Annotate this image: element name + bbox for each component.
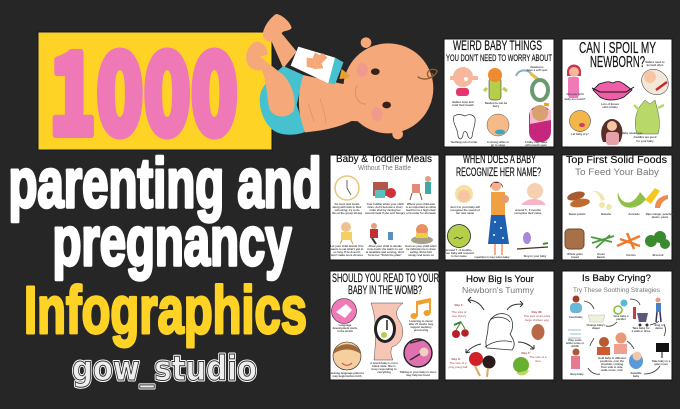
icon: hose: [516, 70, 548, 100]
captions: go to sleep: [491, 143, 505, 147]
panel title: WEIRD BABY THINGS: [453, 37, 542, 53]
captions: around 7 - 9 months,: [446, 248, 472, 252]
icon: smiling child: [333, 342, 361, 370]
icon: diaper: [588, 315, 605, 322]
icon: mother with child: [601, 119, 622, 145]
captions row two: Even as your child when: [405, 244, 437, 248]
panel subtitle: To Feed Your Baby: [575, 167, 659, 178]
captions: recognize the sound of: [450, 208, 480, 212]
captions: Listening to music: [409, 319, 433, 323]
captions: Talking to your baby in utero: [400, 370, 437, 374]
panel: when does a baby recognize her name: RECOGNIZE HER NAME?: [456, 165, 541, 179]
diaper: [260, 66, 306, 135]
captions row two: simply and move on: [408, 253, 434, 257]
icon: baby in high chair: [340, 222, 353, 244]
hand: [307, 52, 327, 69]
captions: Take baby for: [632, 326, 650, 330]
panel title: Top First Solid Foods: [566, 154, 667, 166]
back leg: [263, 14, 297, 68]
icon: stroller: [633, 307, 648, 326]
icon: baby in pink diaper: [450, 67, 478, 96]
icon: clock: [335, 176, 359, 200]
illustration: mother sketch: [485, 314, 514, 350]
icon: crawling baby: [521, 183, 546, 205]
head: [343, 43, 433, 133]
ears: [361, 37, 371, 48]
icon: swaddled newborn: [637, 64, 673, 100]
captions: Teething out of order: [451, 140, 477, 144]
captions row two: Let your child decide if he: [330, 244, 364, 248]
captions: calm a baby: [602, 105, 618, 109]
icon: egg: [532, 324, 544, 340]
icon: swaddled baby: [529, 104, 551, 142]
captions: recognize their name: [515, 211, 542, 215]
captions row two: wants to eat what's put in: [330, 247, 364, 251]
captions: dance: [655, 326, 663, 330]
captions: after 27 weeks may: [409, 322, 434, 326]
panel title: Baby & Toddler Meals: [336, 154, 432, 165]
captions: Feed baby: [569, 315, 583, 319]
icon: toast: [565, 229, 584, 249]
heading: 1000: 1000: [49, 4, 238, 168]
labels: tummy sizes: lime: [535, 359, 541, 363]
captions row one: Avocado: [628, 212, 640, 216]
icon: lime: [513, 357, 529, 375]
panel subtitle: YOU DON'T NEED TO WORRY ABOUT: [446, 53, 552, 64]
icon: swaddled baby: [629, 352, 643, 369]
captions: Burp baby: [570, 372, 584, 376]
arrows: [466, 297, 534, 353]
icon: music note: [410, 298, 431, 319]
icon: banana: [592, 191, 612, 210]
icon: black tv: [656, 343, 669, 358]
captions row two: [330, 244, 437, 257]
captions row two: how much she wants to eat: [368, 247, 403, 251]
captions row two: eating. Show him: [410, 250, 433, 254]
captions: shhhh: [571, 344, 579, 348]
icon: sweet potato: [566, 190, 591, 209]
eyes: [371, 68, 380, 75]
captions row two: [567, 252, 664, 259]
captions: Swaddle: [631, 371, 642, 375]
captions: Let baby cry?: [571, 132, 589, 136]
captions row one: Sweet potato: [569, 212, 586, 216]
captions row one: along with kids in their: [332, 205, 362, 209]
labels: tummy sizes: large chicken egg: [525, 318, 549, 322]
icon: crying baby face: [570, 110, 590, 132]
captions row two: bread: [571, 255, 579, 259]
captions: baby: [633, 374, 640, 378]
labels: tummy sizes: The size of a: [529, 355, 547, 359]
captions: [444, 205, 547, 259]
captions: may begin before birth: [333, 374, 362, 378]
captions: support auditory: [410, 325, 432, 329]
captions: blank slate. She is: [372, 364, 396, 368]
captions row one: schooling; try to do: [334, 208, 360, 212]
yellow banner with 1000: [38, 4, 272, 168]
arrows: [584, 299, 666, 374]
icon: feeding mother: [570, 296, 582, 313]
labels: tummy sizes: Day 1:: [454, 303, 464, 307]
labels: tummy sizes: one cherry: [452, 314, 467, 318]
panel: when does a baby recognize her name: [444, 152, 554, 260]
captions row one: rules, don't become a short: [368, 205, 403, 209]
captions: Hold baby in different: [598, 356, 626, 360]
captions: busy responding to: [372, 367, 397, 371]
icon: baby with pacifier: [487, 114, 509, 136]
icon: pacifier: [614, 300, 628, 314]
icon: shower: [568, 330, 581, 338]
captions row two: force her "finish the plate": [368, 253, 403, 257]
icon: family group: [597, 332, 627, 355]
captions row one: [332, 202, 436, 215]
captions: [451, 65, 548, 147]
captions: positions, over the: [600, 359, 624, 363]
icon: green monster: [484, 68, 507, 100]
labels: tummy sizes: Day 30:: [532, 310, 542, 314]
captions: quiet room: [654, 362, 669, 366]
captions: to her name: [451, 254, 467, 258]
captions: her own name: [456, 211, 475, 215]
captions: development starts: [333, 326, 358, 330]
icon: pregnant belly with fetus: [371, 303, 403, 360]
captions: in the womb: [337, 329, 353, 333]
captions: Cuddles are good: [634, 135, 657, 139]
icon: food and apple: [373, 182, 396, 198]
captions: have a soft spot: [527, 68, 547, 72]
captions row two: at mealtime and serving, don't: [366, 250, 404, 254]
captions: [565, 60, 665, 143]
front leg: [246, 42, 295, 116]
icon: blonde baby: [455, 185, 473, 203]
panel: can I spoil my newborn: [562, 39, 673, 147]
captions: A baby may sleep: [525, 140, 548, 144]
panel subtitle: Try These Soothing Strategies: [573, 287, 661, 294]
panel: weird baby things: [444, 37, 554, 147]
captions: Lots of kisses: [601, 102, 619, 106]
captions: your baby will respond: [444, 251, 474, 255]
captions row one: [569, 212, 674, 219]
nose: [355, 85, 366, 104]
icon: green face: [448, 224, 470, 248]
icon: woman: [567, 64, 581, 98]
captions: baby too much?: [565, 97, 586, 101]
icon: mango and peach slices: [645, 188, 668, 208]
labels: tummy sizes: The size of a: [449, 361, 467, 365]
icon: bird on branch: [517, 232, 548, 249]
captions: shoulder, rocking: [601, 362, 624, 366]
labels: tummy sizes: Day 3:: [451, 357, 461, 361]
cheeks: [357, 63, 368, 77]
captions: Babies form and: [452, 100, 474, 104]
captions: Change baby's: [586, 323, 606, 327]
captions: everything: [377, 370, 391, 374]
labels: tummy sizes: The size of: [452, 310, 466, 314]
captions: Language: [339, 323, 352, 327]
captions row one: plums, pears: [652, 215, 669, 219]
captions: walk, move, rock: [600, 368, 623, 372]
captions: [330, 319, 437, 378]
captions row one: Your toddler when your child: [367, 202, 404, 206]
captions row two: Allow your child to decide: [368, 244, 402, 248]
captions row one: Do most and meals: [335, 202, 360, 206]
captions row one: this at the group all day: [332, 211, 363, 215]
captions row one: is as important as what,: [406, 205, 436, 209]
headline: Infographics: Infographics: [24, 273, 307, 348]
captions: Give baby a: [613, 314, 629, 318]
captions row two: Carrots: [626, 253, 636, 257]
captions: pacifier: [616, 317, 626, 321]
icon: green beans: [591, 235, 614, 248]
captions: a walk or drive: [632, 329, 651, 333]
icon: magenta circle with fetus: [404, 339, 432, 367]
captions: A strong reflex to: [487, 140, 509, 144]
captions: [565, 314, 671, 378]
panel title: SHOULD YOU READ TO YOUR: [332, 271, 439, 285]
labels: tummy sizes: The size of an extra: [524, 314, 550, 318]
icon: avocado: [618, 192, 646, 208]
captions row two: Beans: [597, 255, 606, 259]
labels: tummy sizes: Day 7:: [521, 351, 531, 355]
captions row two: Whole grain: [567, 252, 583, 256]
icon: father feeding toddler: [370, 223, 393, 244]
icon: cherries: [452, 322, 469, 338]
captions: for your baby: [636, 139, 654, 143]
panel: how big is your newborn's tummy: [445, 271, 554, 380]
captions row one: Banana: [601, 212, 611, 216]
headline: parenting and: parenting and: [8, 144, 322, 222]
illustration: baby drinking from bottle: [246, 14, 437, 139]
captions row one: feed her in a high chair: [406, 208, 436, 212]
icon: carrots: [617, 233, 640, 249]
captions: diaper: [592, 326, 600, 330]
captions row two: don't make more choices: [331, 253, 364, 257]
captions: from side to side,: [601, 365, 623, 369]
labels: tummy sizes: [449, 303, 550, 369]
captions: Newborns: [530, 65, 544, 69]
captions row one: or booster for all meals: [406, 211, 436, 215]
captions: Hearing language patterns: [330, 371, 364, 375]
labels: tummy sizes: ping pong ball: [449, 365, 468, 369]
captions: Just 4 to your baby will: [450, 205, 480, 209]
bottle: [291, 47, 343, 84]
panel title: How Big Is Your: [466, 274, 534, 285]
captions: processing: [414, 328, 429, 332]
icon: tooth: [454, 114, 475, 139]
headline: pregnancy: pregnancy: [52, 202, 292, 280]
captions: Can you hold: [566, 92, 584, 96]
icon: ping pong paddles: [469, 352, 496, 377]
icon: rocking mother: [571, 348, 580, 369]
captions: Sing to your baby: [524, 254, 547, 258]
panel subtitle: Newborn's Tummy: [462, 285, 535, 295]
captions: hold their breath: [452, 103, 474, 107]
captions row two: Broccoli: [653, 253, 664, 257]
captions row two: he indicates he is done: [406, 247, 436, 251]
panel: baby and toddler meals: [330, 154, 439, 260]
captions: Newborns can be: [485, 101, 508, 105]
captions row two: so long. If he doesn't,: [333, 250, 361, 254]
panel: top first solid foods: [562, 154, 674, 260]
icon: mother holding baby: [488, 181, 509, 255]
captions: hairy: [493, 104, 500, 108]
captions row one: Where your child eats: [407, 202, 435, 206]
captions: around 5 - 6 months: [515, 208, 541, 212]
captions: Sing or: [654, 323, 664, 327]
author name: gow_studio: gow_studio: [72, 349, 257, 389]
captions: repetition is key when baby: [474, 255, 510, 259]
panel: can I spoil my newborn: NEWBORN?: [590, 54, 645, 71]
captions row one: order chef by mixing her: [369, 208, 401, 212]
captions: Play some: [568, 338, 582, 342]
hair curl: [418, 69, 437, 79]
captions: be held often: [647, 63, 664, 67]
panel title: Is Baby Crying?: [582, 273, 651, 284]
panel: is baby crying: [562, 271, 672, 380]
icon: pink circle with baby: [332, 298, 356, 324]
icon: green cat: [634, 100, 664, 134]
captions: A womb baby is not a: [370, 361, 398, 365]
panel: should you read to your baby in the womb: BABY IN THE WOMB?: [348, 283, 422, 297]
icon: lips: [592, 82, 634, 100]
icon: parent and high chair: [410, 176, 431, 200]
torso and neck: [299, 75, 367, 132]
captions: Take baby to a: [652, 359, 671, 363]
panel: should you read to your baby in the womb: [330, 271, 439, 380]
captions: Baby needs you: [622, 131, 643, 135]
icon: broccoli: [645, 231, 670, 249]
captions: Babies need to: [645, 60, 665, 64]
captions row one: Ripe mango, peaches,: [646, 212, 674, 216]
captions: with mouth open: [524, 143, 547, 147]
captions: may help her bond: [406, 373, 430, 377]
captions row two: Green: [597, 252, 605, 256]
captions: white noise or: [565, 341, 584, 345]
author name: gow_studio: gow_studio: [72, 349, 257, 389]
panel title: WHEN DOES A BABY: [463, 152, 536, 166]
icon: man dancing: [656, 298, 661, 322]
panel subtitle: Without The Battle: [358, 165, 411, 172]
captions row one: second meal if she isn't hungry: [365, 211, 406, 215]
icon: baby with plate: [411, 224, 433, 244]
